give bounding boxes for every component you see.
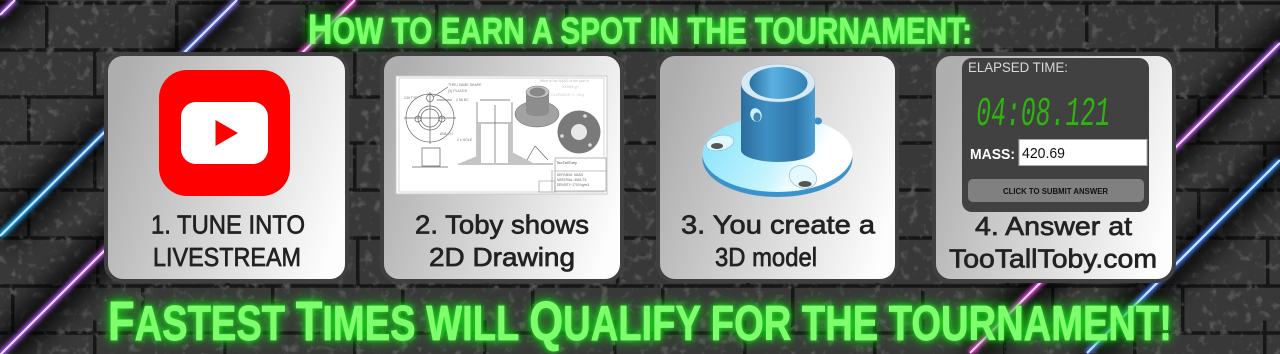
digital timer: 04:08.121 xyxy=(974,92,1112,138)
3D model of part xyxy=(702,64,852,197)
title: HOW TO EARN A SPOT IN THE TOURNAMENT: xyxy=(308,6,972,52)
mass label: MASS: xyxy=(970,146,1015,163)
title block: TooTallToby xyxy=(556,160,577,165)
answer form screenshot xyxy=(962,58,1149,212)
submit button: CLICK TO SUBMIT ANSWER xyxy=(1003,187,1108,196)
step 1 label: 1. TUNE INTO xyxy=(151,210,305,240)
step 2 label: 2D Drawing xyxy=(429,242,575,272)
2D engineering drawing: XXXXX g? xyxy=(562,85,579,89)
submit button xyxy=(968,179,1144,202)
step 3 label: 3. You create a xyxy=(681,210,876,240)
step 4 label: 4. Answer at xyxy=(975,211,1133,241)
title block: DEFINING: MASS xyxy=(557,173,583,177)
mass input xyxy=(1019,140,1147,166)
step 4 label: TooTallToby.com xyxy=(949,244,1157,274)
2D engineering drawing: (3) PLACES xyxy=(448,89,468,93)
2D engineering drawing: 130 TYP xyxy=(404,96,418,100)
panel: step 4 answer xyxy=(934,54,1174,281)
title block: DENSITY: 2700 kg/m3 xyxy=(557,183,589,187)
iso preview of part xyxy=(515,86,559,127)
step 4 label xyxy=(949,211,1157,274)
underside view of part xyxy=(558,110,600,154)
step 3 label xyxy=(681,210,876,272)
panel: step 1 livestream xyxy=(106,54,347,281)
step 1 label: LIVESTREAM xyxy=(153,242,301,272)
title block xyxy=(539,158,606,192)
2D engineering drawing: Ø48 CH xyxy=(440,132,453,136)
2D engineering drawing: THRU SAME SHAPE xyxy=(448,83,482,87)
step 1 label xyxy=(151,210,305,272)
step 2 label xyxy=(415,210,589,272)
step 2 label: 2. Toby shows xyxy=(415,210,589,240)
2D engineering drawing: 2 x HOLE xyxy=(457,138,473,142)
icon: youtube logo xyxy=(159,70,290,196)
elapsed time label: ELAPSED TIME: xyxy=(968,59,1068,75)
2D engineering drawing: What is the MASS of the part in xyxy=(540,79,589,83)
2D engineering drawing: 2 56 BC xyxy=(456,98,469,102)
panel: step 3 model xyxy=(658,54,897,281)
step 3 label: 3D model xyxy=(715,242,817,272)
mass input: 420.69 xyxy=(1022,145,1065,162)
2D engineering drawing xyxy=(396,76,607,194)
title block: MATERIAL: 6061-T6 xyxy=(557,178,587,182)
panel: step 2 drawing xyxy=(382,54,622,281)
2D engineering drawing: TOLERANCE +/- .05 g xyxy=(549,93,584,97)
